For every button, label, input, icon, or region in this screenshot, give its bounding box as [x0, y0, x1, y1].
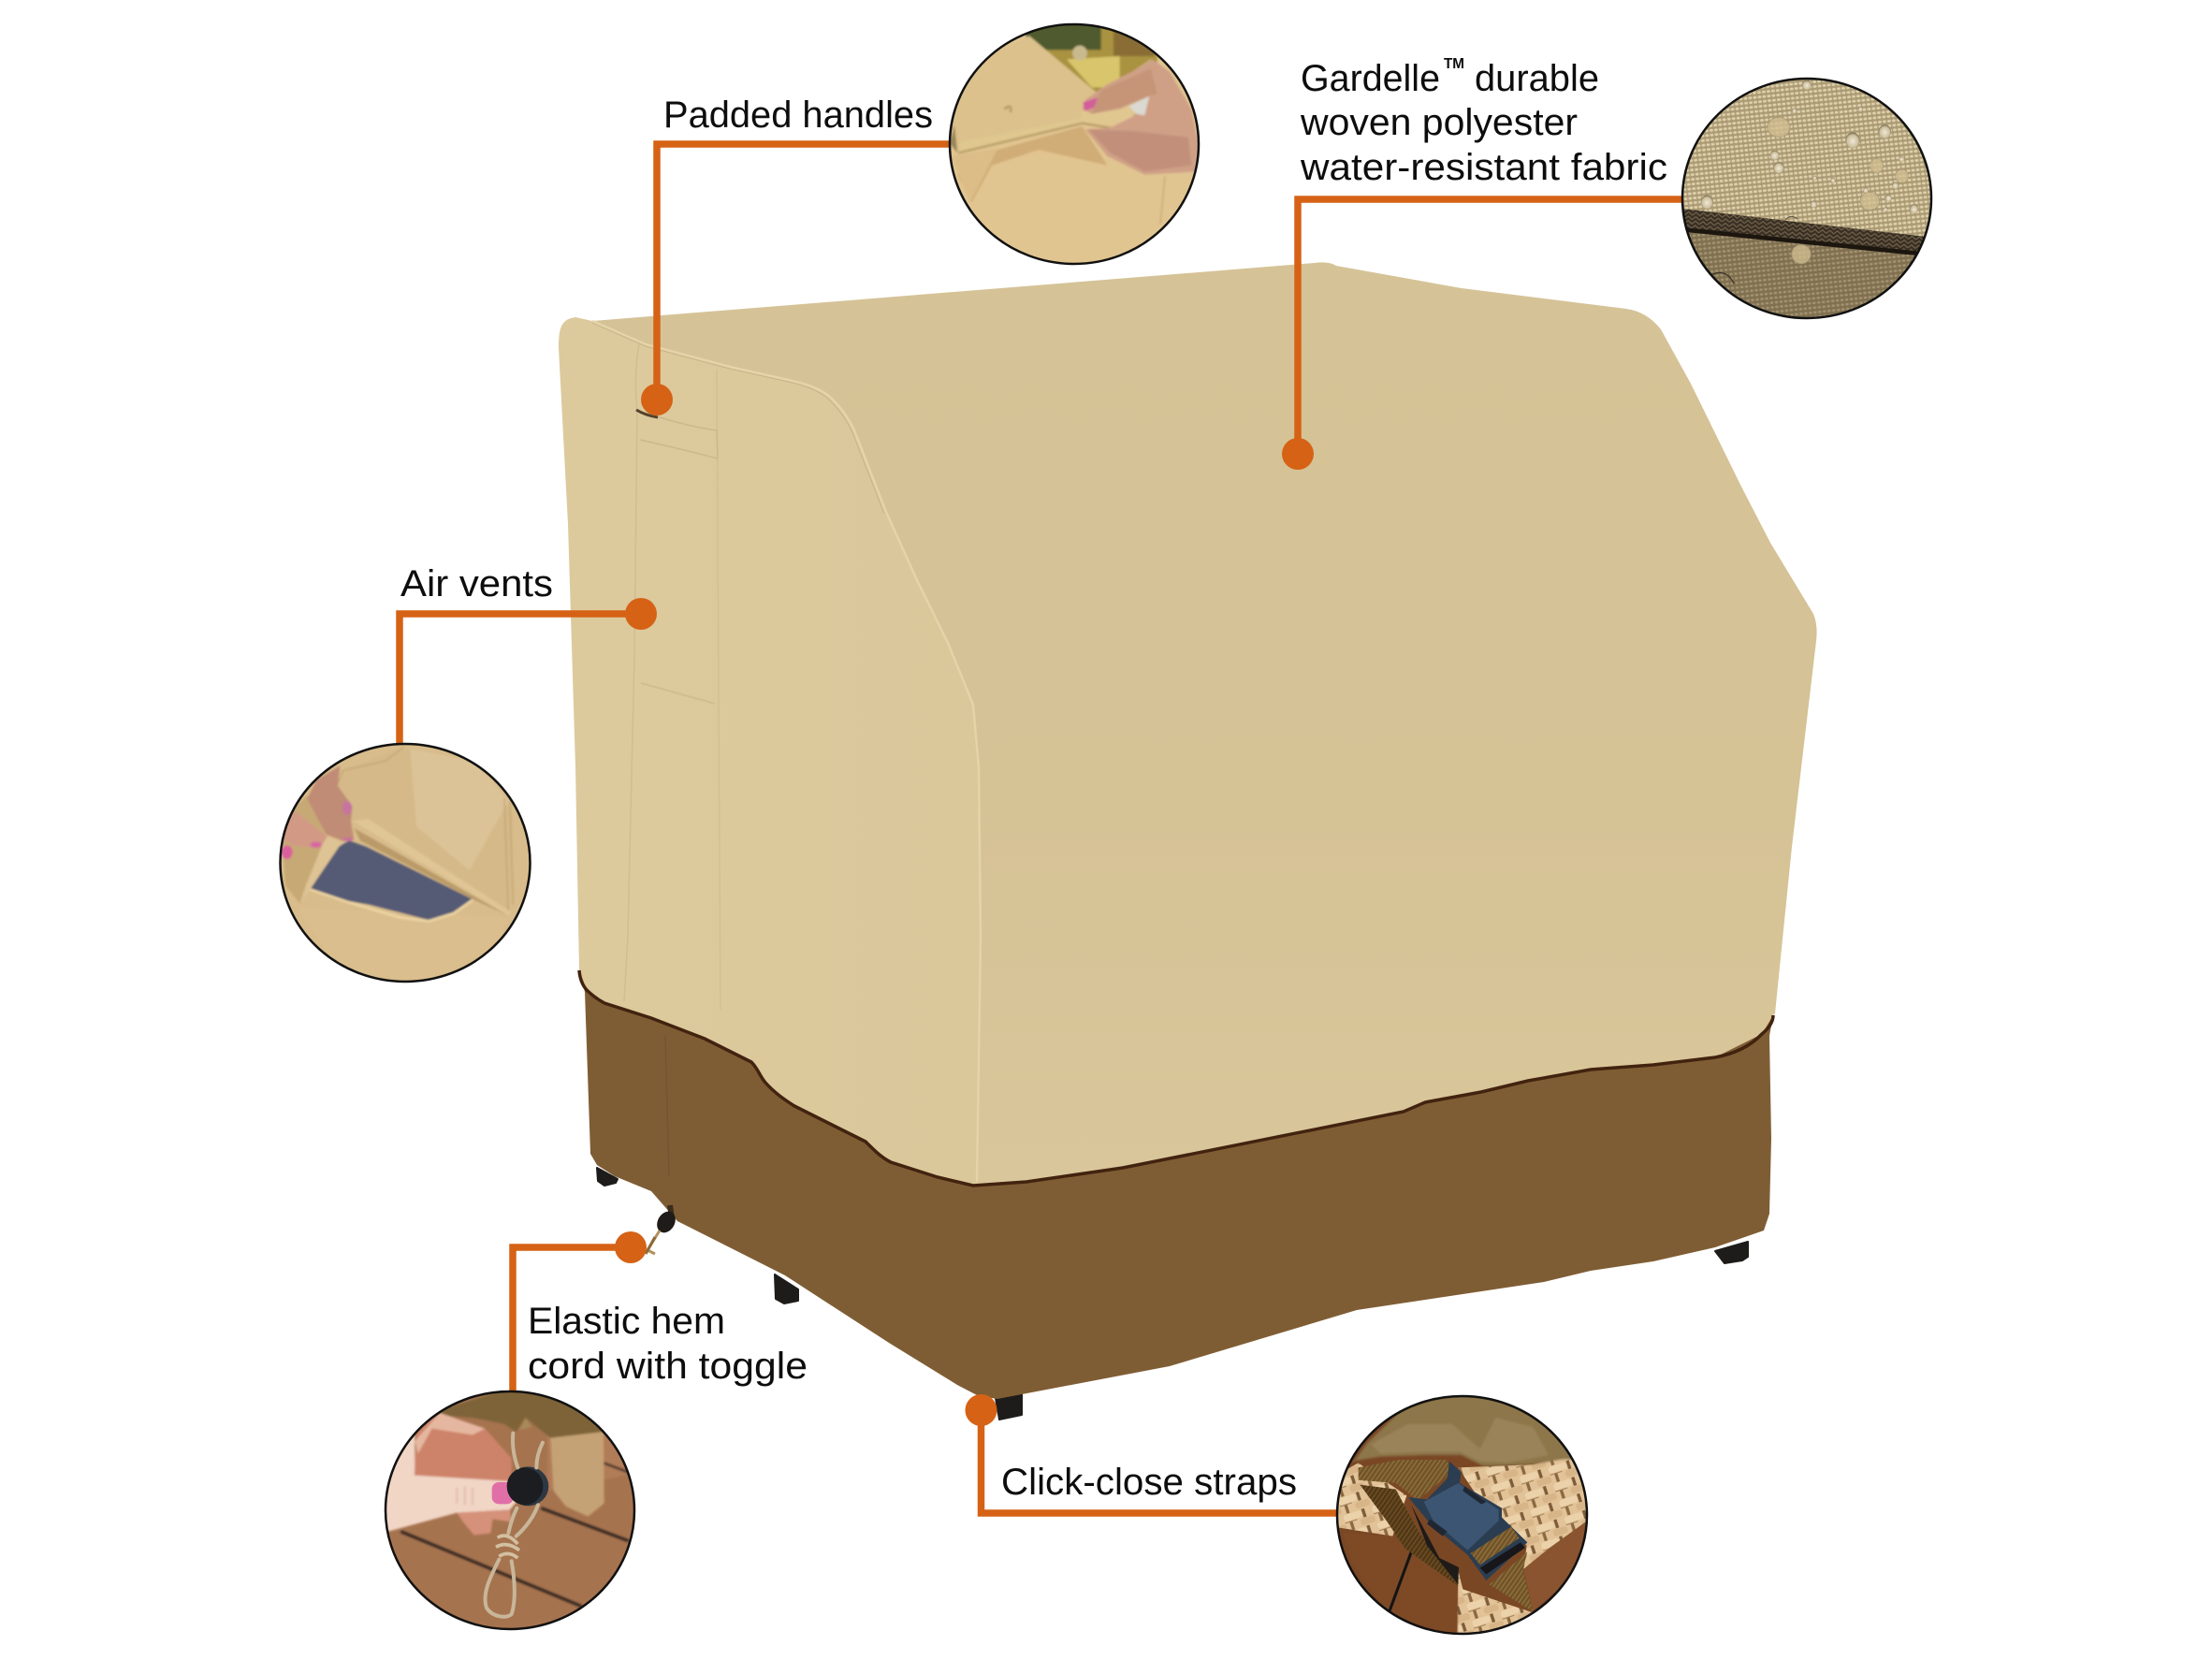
callout: fabric: [1282, 56, 1684, 470]
label: Click-close straps: [1001, 1462, 1297, 1503]
label: Elastic hem: [528, 1301, 725, 1342]
label: woven polyester: [1300, 102, 1578, 143]
leader line: [657, 144, 954, 400]
product: bench cover: [559, 262, 1817, 1420]
cover upper: side panel: [559, 317, 981, 1186]
piping trim: [579, 970, 1773, 1186]
callout: click-close straps: [966, 1394, 1339, 1513]
label: Gardelle: [1301, 58, 1440, 99]
cord edge: [1684, 209, 1924, 251]
leader line: [400, 614, 641, 745]
cord toggle on hem: [646, 1205, 679, 1254]
fingers: [307, 765, 354, 841]
cover upper: front panel: [592, 262, 1817, 1186]
back panel shading: [339, 747, 513, 914]
upper fabric: [1025, 35, 1097, 103]
label: Padded handles: [663, 95, 933, 136]
toggle: [516, 1466, 548, 1507]
marker dot: [1282, 438, 1314, 470]
garden background: [1046, 28, 1158, 93]
piping seams: [592, 321, 981, 1182]
webbing straps: [1359, 1460, 1453, 1500]
deck boards: [1390, 1551, 1411, 1611]
hand: [1083, 59, 1199, 175]
marker dot: [966, 1394, 997, 1426]
inset photo: padded handle: [945, 19, 1207, 271]
leader line: [981, 1410, 1339, 1513]
water drops: [1701, 80, 1918, 264]
hand: [415, 1413, 512, 1481]
leader line: [513, 1247, 631, 1392]
nail: [492, 1482, 514, 1504]
wicker leg: [550, 1432, 604, 1517]
wicker: [1458, 1452, 1593, 1569]
callout: air vents: [400, 563, 657, 745]
cover skirt: brown: [579, 970, 1773, 1399]
marker dot: [615, 1231, 647, 1263]
marker dot: [641, 384, 673, 415]
label: durable: [1475, 58, 1599, 99]
label: TM: [1444, 56, 1464, 72]
skirt seam: [665, 1036, 669, 1176]
inset photo: buckle strap: [1333, 1390, 1595, 1642]
label: water-resistant fabric: [1300, 147, 1667, 188]
label: Air vents: [400, 563, 553, 604]
marker dot: [625, 598, 657, 630]
furniture legs: [597, 1168, 1748, 1420]
cords: [486, 1434, 543, 1617]
seams: [339, 747, 403, 782]
label: [1300, 56, 1667, 188]
callout: elastic hem cord: [513, 1231, 808, 1392]
buckle: [1408, 1462, 1527, 1584]
cover hem: [440, 1392, 603, 1439]
inset photo: cord toggle: [379, 1385, 641, 1638]
cover fold: [1351, 1397, 1572, 1467]
knot: [496, 1536, 519, 1558]
deck lines: [400, 1532, 582, 1607]
callout: padded handles: [641, 95, 954, 415]
inset photo: air vent: [276, 739, 538, 992]
mesh vent: [311, 840, 472, 920]
label: [528, 1301, 808, 1387]
leader line: [1298, 199, 1684, 454]
label: cord with toggle: [528, 1346, 808, 1387]
vent flaps: [353, 819, 512, 916]
folded strap band: [1138, 59, 1151, 67]
inset photo: water-resistant fabric: [1680, 75, 1942, 328]
shadow under handle: [957, 126, 1107, 203]
